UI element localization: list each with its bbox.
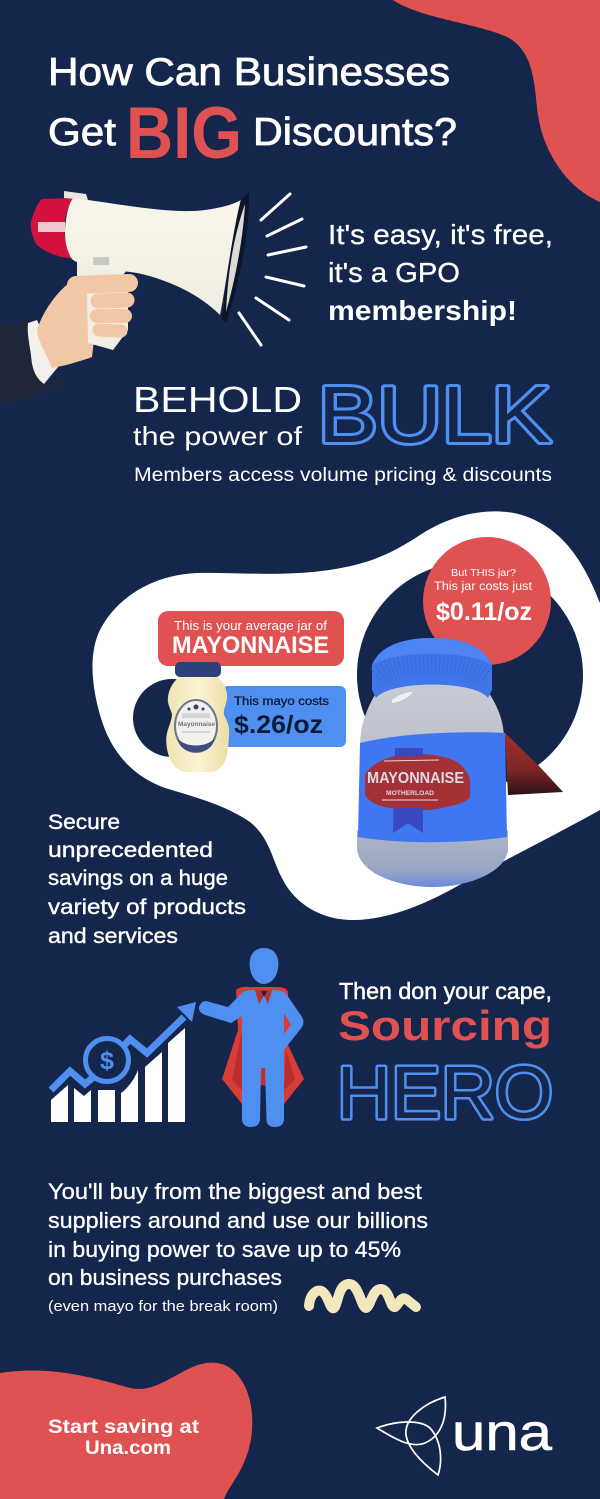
text: GPO membership: it's a GPO (328, 257, 460, 288)
heading: behold the power of: the power of (133, 421, 303, 451)
callout: this mayo costs: This mayo costs (234, 696, 329, 708)
heading: behold the power of (133, 379, 303, 451)
text: buying power: suppliers around and use our billions (48, 1208, 428, 1233)
heading: BULK: BULK (318, 370, 551, 459)
logo mark (377, 1397, 445, 1475)
icon: sound lines (239, 194, 306, 345)
callout: average jar (158, 611, 344, 666)
callout: average jar: MAYONNAISE (172, 632, 329, 659)
navy circle behind small jar (133, 679, 211, 757)
text: buying power: You'll buy from the biggest and best (48, 1179, 422, 1204)
text: secure savings: and services (48, 924, 178, 948)
text: secure savings: Secure (48, 810, 120, 834)
callout: red circle price (423, 537, 551, 665)
title: Get (48, 111, 116, 154)
icon: small mayonnaise jar: Mayonnaise (178, 722, 216, 728)
text: buying power: (even mayo for the break room) (48, 1298, 278, 1315)
suit (199, 990, 304, 1127)
icon: hero figure (199, 948, 304, 1127)
text: GPO membership (328, 219, 553, 326)
title: Discounts? (253, 111, 457, 154)
title: BIG (126, 93, 242, 174)
handle (77, 257, 128, 350)
label ribbon (393, 748, 423, 833)
jar cape (505, 733, 563, 795)
text: secure savings (48, 810, 246, 948)
jar label (358, 732, 507, 842)
text: secure savings: variety of products (48, 895, 246, 919)
palm (37, 278, 100, 368)
coin halo (79, 1032, 135, 1088)
callout: average jar: This is your average jar of (174, 619, 328, 633)
text: volume pricing: Members access volume pricing & discounts (134, 465, 552, 486)
sleeve (0, 320, 65, 403)
icon: growth chart: $ (100, 1047, 114, 1075)
jar glass (360, 676, 504, 840)
text: then don your cape: Then don your cape, (339, 978, 552, 1004)
red back cap (31, 198, 73, 258)
icon: hand holding megaphone (0, 191, 249, 403)
label badge (365, 754, 470, 810)
title: How Can Businesses (48, 51, 450, 94)
heading: HERO: HERO (337, 1051, 553, 1134)
head (250, 948, 278, 984)
call to action (48, 1417, 200, 1459)
call to action: Una.com (85, 1438, 171, 1459)
arrow line (51, 1017, 184, 1090)
text: secure savings: unprecedented (48, 838, 213, 862)
callout: red circle price: But THIS jar? (451, 567, 516, 579)
text: GPO membership: It's easy, it's free, (328, 219, 553, 250)
callout: this mayo costs (222, 686, 346, 747)
text: GPO membership: membership! (328, 295, 517, 326)
heading: sourcing: Sourcing (338, 1002, 552, 1049)
heading: behold the power of: BEHOLD (133, 379, 302, 420)
arrow head (177, 1002, 196, 1022)
cape (222, 987, 304, 1104)
text: secure savings: savings on a huge (48, 866, 228, 890)
icon: small mayonnaise jar (166, 662, 229, 772)
logo: Una (377, 1397, 552, 1475)
callout: red circle price: This jar costs just (434, 581, 533, 593)
callout: this mayo costs: $.26/oz (234, 711, 323, 739)
white blob panel (92, 511, 600, 920)
title (48, 51, 457, 174)
text: buying power: on business purchases (48, 1265, 282, 1290)
fingers (76, 283, 129, 331)
jar base (357, 830, 508, 887)
logo wordmark: una (452, 1404, 552, 1462)
top right corner blob (393, 0, 600, 202)
text: buying power (48, 1179, 428, 1315)
icon: big mayonnaise jar with cape (357, 638, 563, 887)
icon: big mayonnaise jar with cape: MAYONNAISE (367, 770, 464, 787)
navy circle behind big jar (357, 562, 583, 788)
arm gap (284, 1013, 291, 1034)
shirt cuff (28, 320, 58, 384)
bottom left corner blob (0, 1363, 252, 1499)
bars (51, 1028, 185, 1122)
dollar coin (86, 1038, 128, 1082)
horn body (65, 198, 241, 315)
icon: mayo squiggle (309, 1284, 416, 1308)
icon: big mayonnaise jar with cape: MOTHERLOAD (386, 790, 434, 797)
call to action: Start saving at (48, 1417, 200, 1438)
collar and tie (255, 990, 272, 1004)
jar lid (372, 638, 492, 698)
text: buying power: in buying power to save up to 45% (48, 1237, 401, 1262)
lid ridges (378, 663, 487, 677)
bell rim (222, 193, 249, 322)
icon: growth chart (51, 1002, 196, 1122)
callout: red circle price: $0.11/oz (436, 598, 532, 626)
